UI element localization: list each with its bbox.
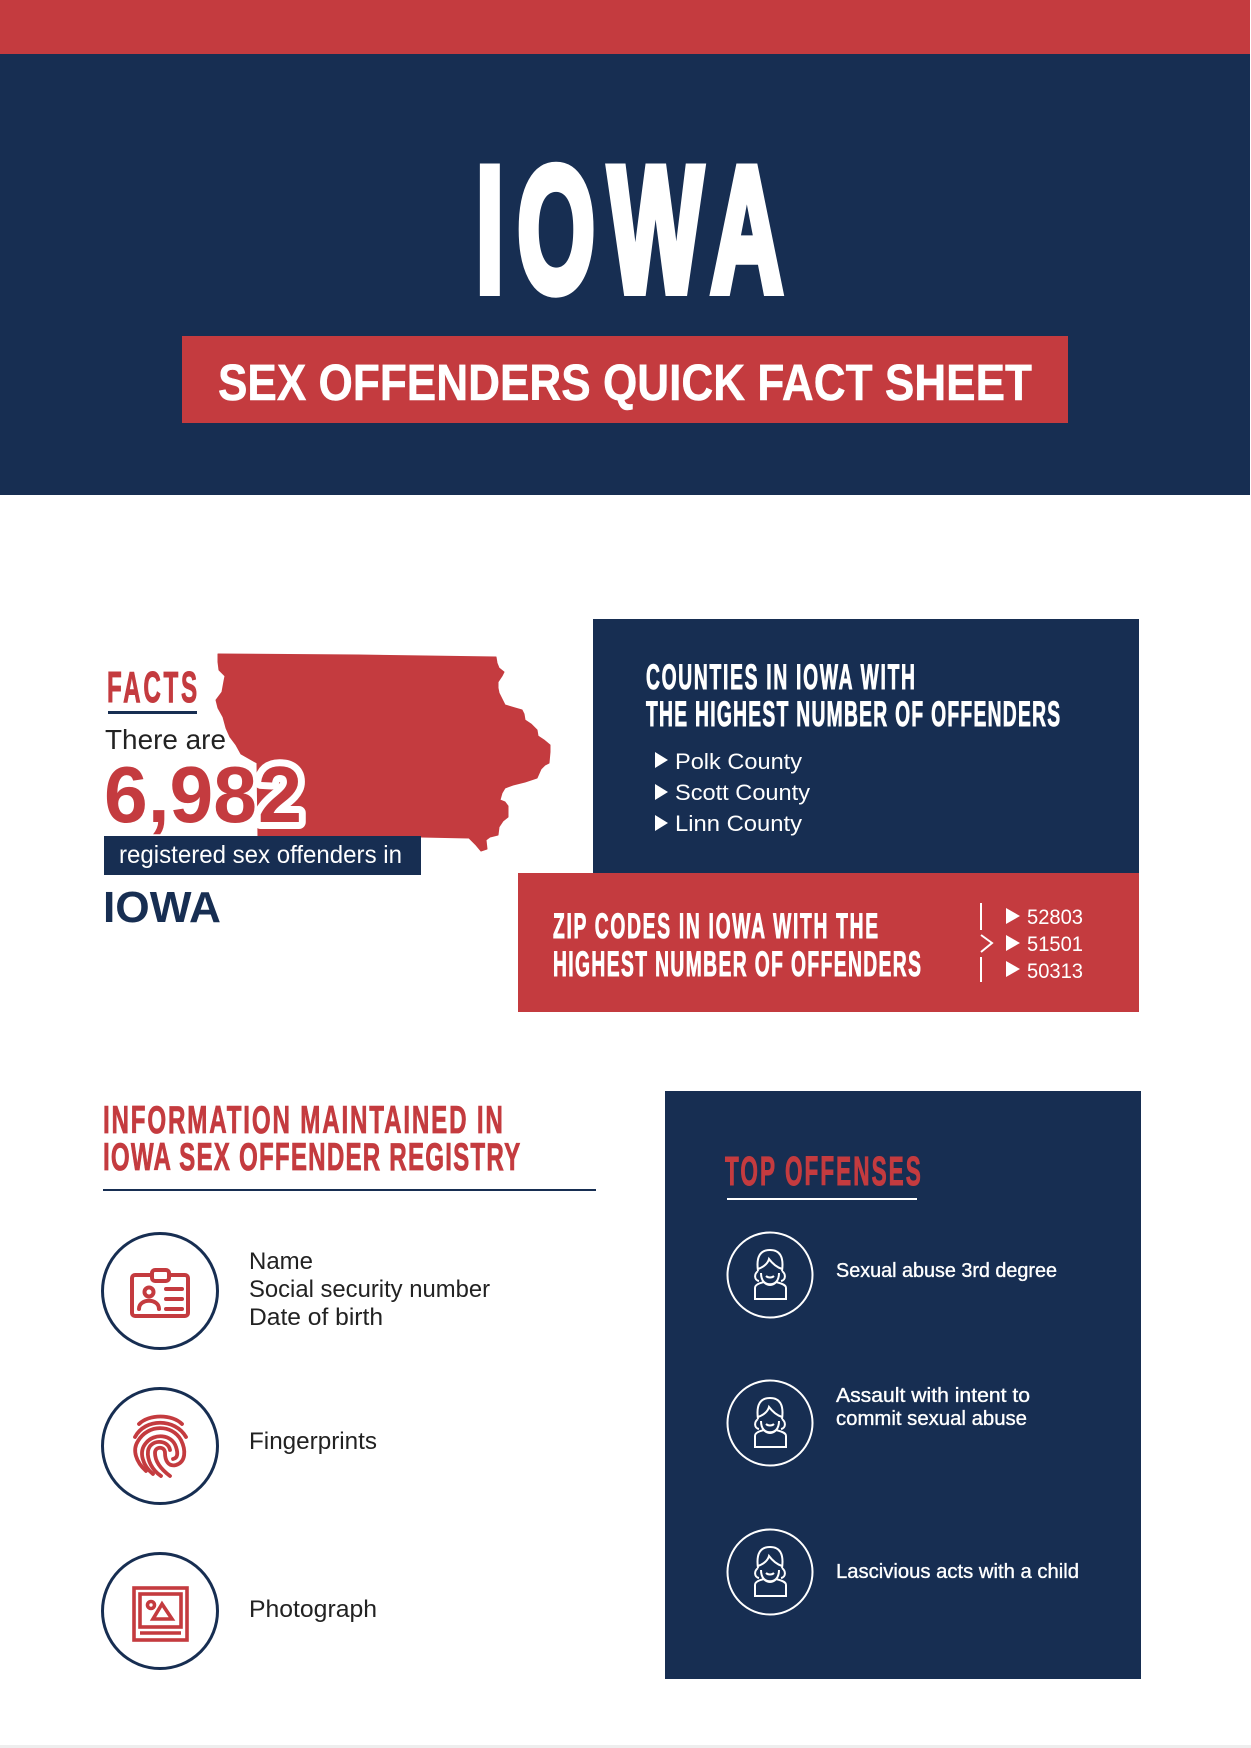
counties list: Polk County xyxy=(675,749,802,774)
map of Iowa xyxy=(216,654,550,851)
top offenses heading: TOP OFFENSES xyxy=(725,1149,921,1195)
header navy panel xyxy=(0,54,1250,495)
statistic: 6,982: 6,98 xyxy=(104,750,257,839)
counties heading xyxy=(646,657,1060,733)
zip codes heading: HIGHEST NUMBER OF OFFENDERS xyxy=(553,944,921,983)
icon: photograph xyxy=(102,1554,218,1668)
text: offense 2 xyxy=(836,1385,1030,1430)
label bar: registered sex offenders in: registered sex offenders in xyxy=(119,841,402,869)
registry heading: IOWA SEX OFFENDER REGISTRY xyxy=(103,1135,521,1178)
counties list: Scott County xyxy=(675,780,810,805)
registry heading: INFORMATION MAINTAINED IN xyxy=(103,1098,503,1141)
text: offense 3: Lascivious acts with a child xyxy=(836,1561,1079,1583)
header top red band xyxy=(0,0,1250,54)
panel: zip codes xyxy=(518,873,1139,1012)
registry heading xyxy=(103,1098,596,1191)
bracket arrow xyxy=(981,903,992,982)
text: offense 1: Sexual abuse 3rd degree xyxy=(836,1260,1057,1282)
zip codes heading xyxy=(553,906,921,983)
text: name, SSN, date of birth: Name xyxy=(249,1248,313,1275)
counties list: Linn County xyxy=(675,811,802,836)
text: There are: There are xyxy=(105,724,226,755)
zip list: 52803 xyxy=(1027,906,1083,929)
counties list xyxy=(655,749,810,836)
text: name, SSN, date of birth: Date of birth xyxy=(249,1304,383,1331)
text: fingerprints: Fingerprints xyxy=(249,1428,377,1455)
statistic: 6,982: 2 xyxy=(258,750,302,839)
panel: counties xyxy=(593,619,1139,873)
icon: fingerprint xyxy=(102,1388,218,1504)
icon: ID badge xyxy=(102,1234,218,1348)
icon: person 1 xyxy=(728,1232,812,1318)
zip codes heading: ZIP CODES IN IOWA WITH THE xyxy=(553,906,878,945)
counties heading: THE HIGHEST NUMBER OF OFFENDERS xyxy=(646,694,1060,733)
icon: person 3 xyxy=(728,1530,812,1614)
text: name, SSN, date of birth: Social security number xyxy=(249,1276,490,1303)
text: offense 2: commit sexual abuse xyxy=(836,1408,1027,1430)
text: offense 2: Assault with intent to xyxy=(836,1385,1030,1407)
subtitle banner xyxy=(182,336,1068,423)
statistic: 6,982: 2 xyxy=(258,750,302,839)
text: photograph: Photograph xyxy=(249,1596,377,1623)
text: IOWA: IOWA xyxy=(103,883,221,932)
title: IOWA: IOWA xyxy=(476,129,783,329)
counties heading: COUNTIES IN IOWA WITH xyxy=(646,657,915,696)
zip list: 50313 xyxy=(1027,960,1083,983)
panel: top offenses xyxy=(665,1091,1141,1679)
icon: person 2 xyxy=(728,1380,812,1466)
label bar: registered sex offenders in xyxy=(104,836,421,875)
facts heading: FACTS xyxy=(107,662,197,712)
zip list: 51501 xyxy=(1027,933,1083,956)
zip list xyxy=(1006,906,1083,983)
text: name, SSN, date of birth xyxy=(249,1248,490,1331)
subtitle banner: SEX OFFENDERS QUICK FACT SHEET xyxy=(218,354,1032,411)
